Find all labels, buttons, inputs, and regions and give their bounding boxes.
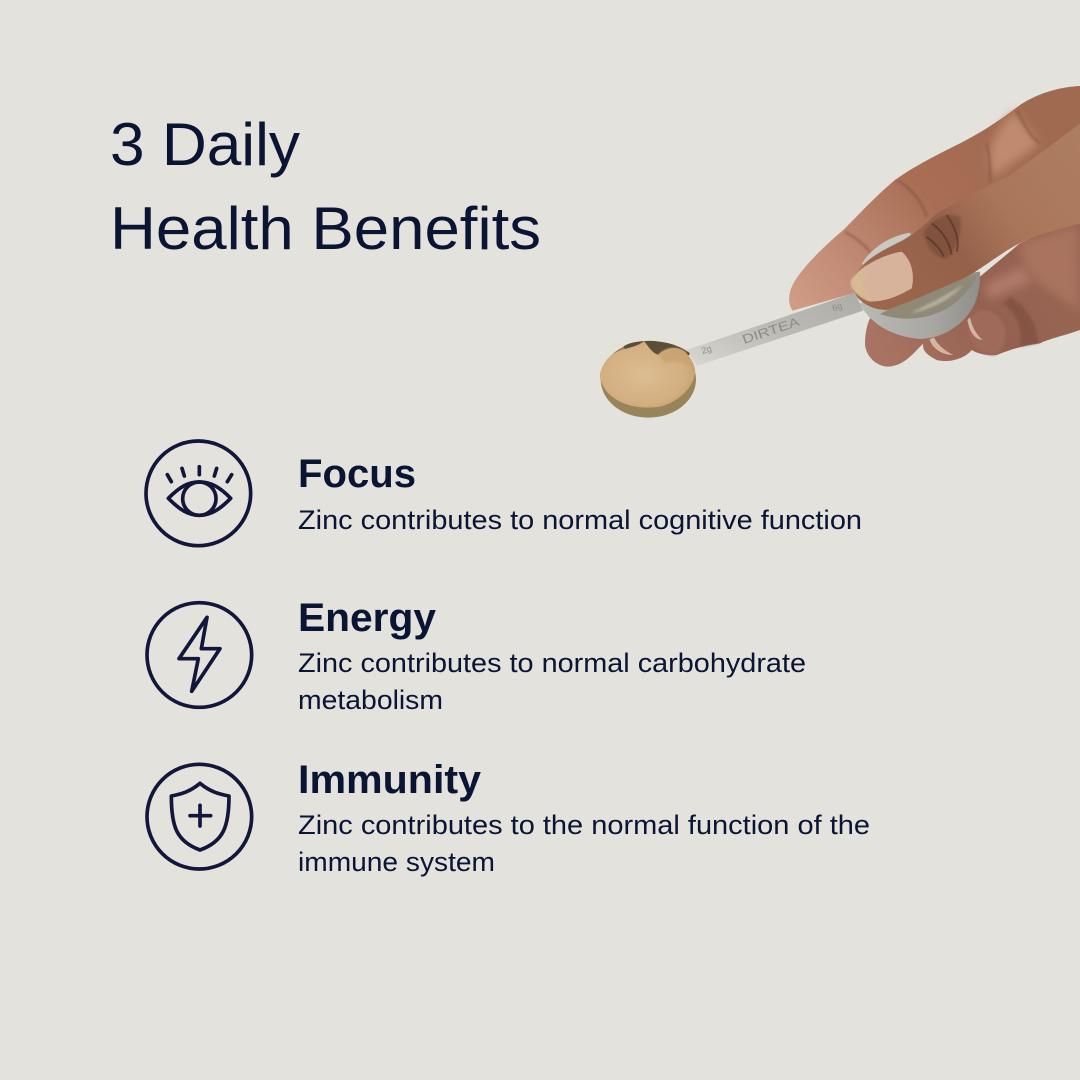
powder scoop <box>600 341 696 418</box>
title <box>110 111 541 262</box>
fingernails <box>929 317 983 355</box>
panel: energy <box>147 596 806 715</box>
thumb <box>852 123 1080 310</box>
spoon handle <box>687 293 863 366</box>
nail tip <box>851 265 870 302</box>
thumbnail <box>851 252 913 302</box>
photo: hand holding measuring spoon with powder <box>600 86 1080 418</box>
description <box>298 810 870 877</box>
thumb knuckle shadow <box>923 215 961 258</box>
panel: focus <box>146 441 862 546</box>
icon: shield with plus <box>147 764 252 869</box>
description: metabolism <box>298 685 443 715</box>
description <box>298 648 806 715</box>
finger shadow <box>1003 297 1038 347</box>
heading: Energy <box>298 596 437 640</box>
icon: lightning bolt <box>147 603 252 707</box>
title: Health Benefits <box>110 195 541 262</box>
finger creases <box>845 110 1040 252</box>
lower fingers <box>865 213 1080 367</box>
knuckle highlight <box>990 112 1040 177</box>
index finger and back of hand <box>789 86 1080 311</box>
description: Zinc contributes to the normal function of the <box>298 810 870 840</box>
spoon bowl <box>860 233 980 339</box>
ring finger tip <box>968 310 1005 355</box>
panel: immunity <box>147 758 870 877</box>
handle engraved text: 6g <box>831 301 843 313</box>
handle engraved text: DIRTEA <box>741 315 802 347</box>
heading: Immunity <box>298 758 482 802</box>
description: Zinc contributes to normal cognitive function <box>298 505 862 535</box>
title: 3 Daily <box>110 111 300 178</box>
icon: eye <box>146 441 251 546</box>
handle engraved text <box>700 301 843 356</box>
description: immune system <box>298 847 495 877</box>
hand <box>789 86 1080 367</box>
heading: Focus <box>298 452 416 496</box>
right palm highlight <box>1020 227 1078 310</box>
description: Zinc contributes to normal carbohydrate <box>298 648 806 678</box>
middle finger highlight <box>983 267 1035 300</box>
handle engraved text: 2g <box>700 343 713 356</box>
thumb knuckle creases <box>927 215 958 257</box>
